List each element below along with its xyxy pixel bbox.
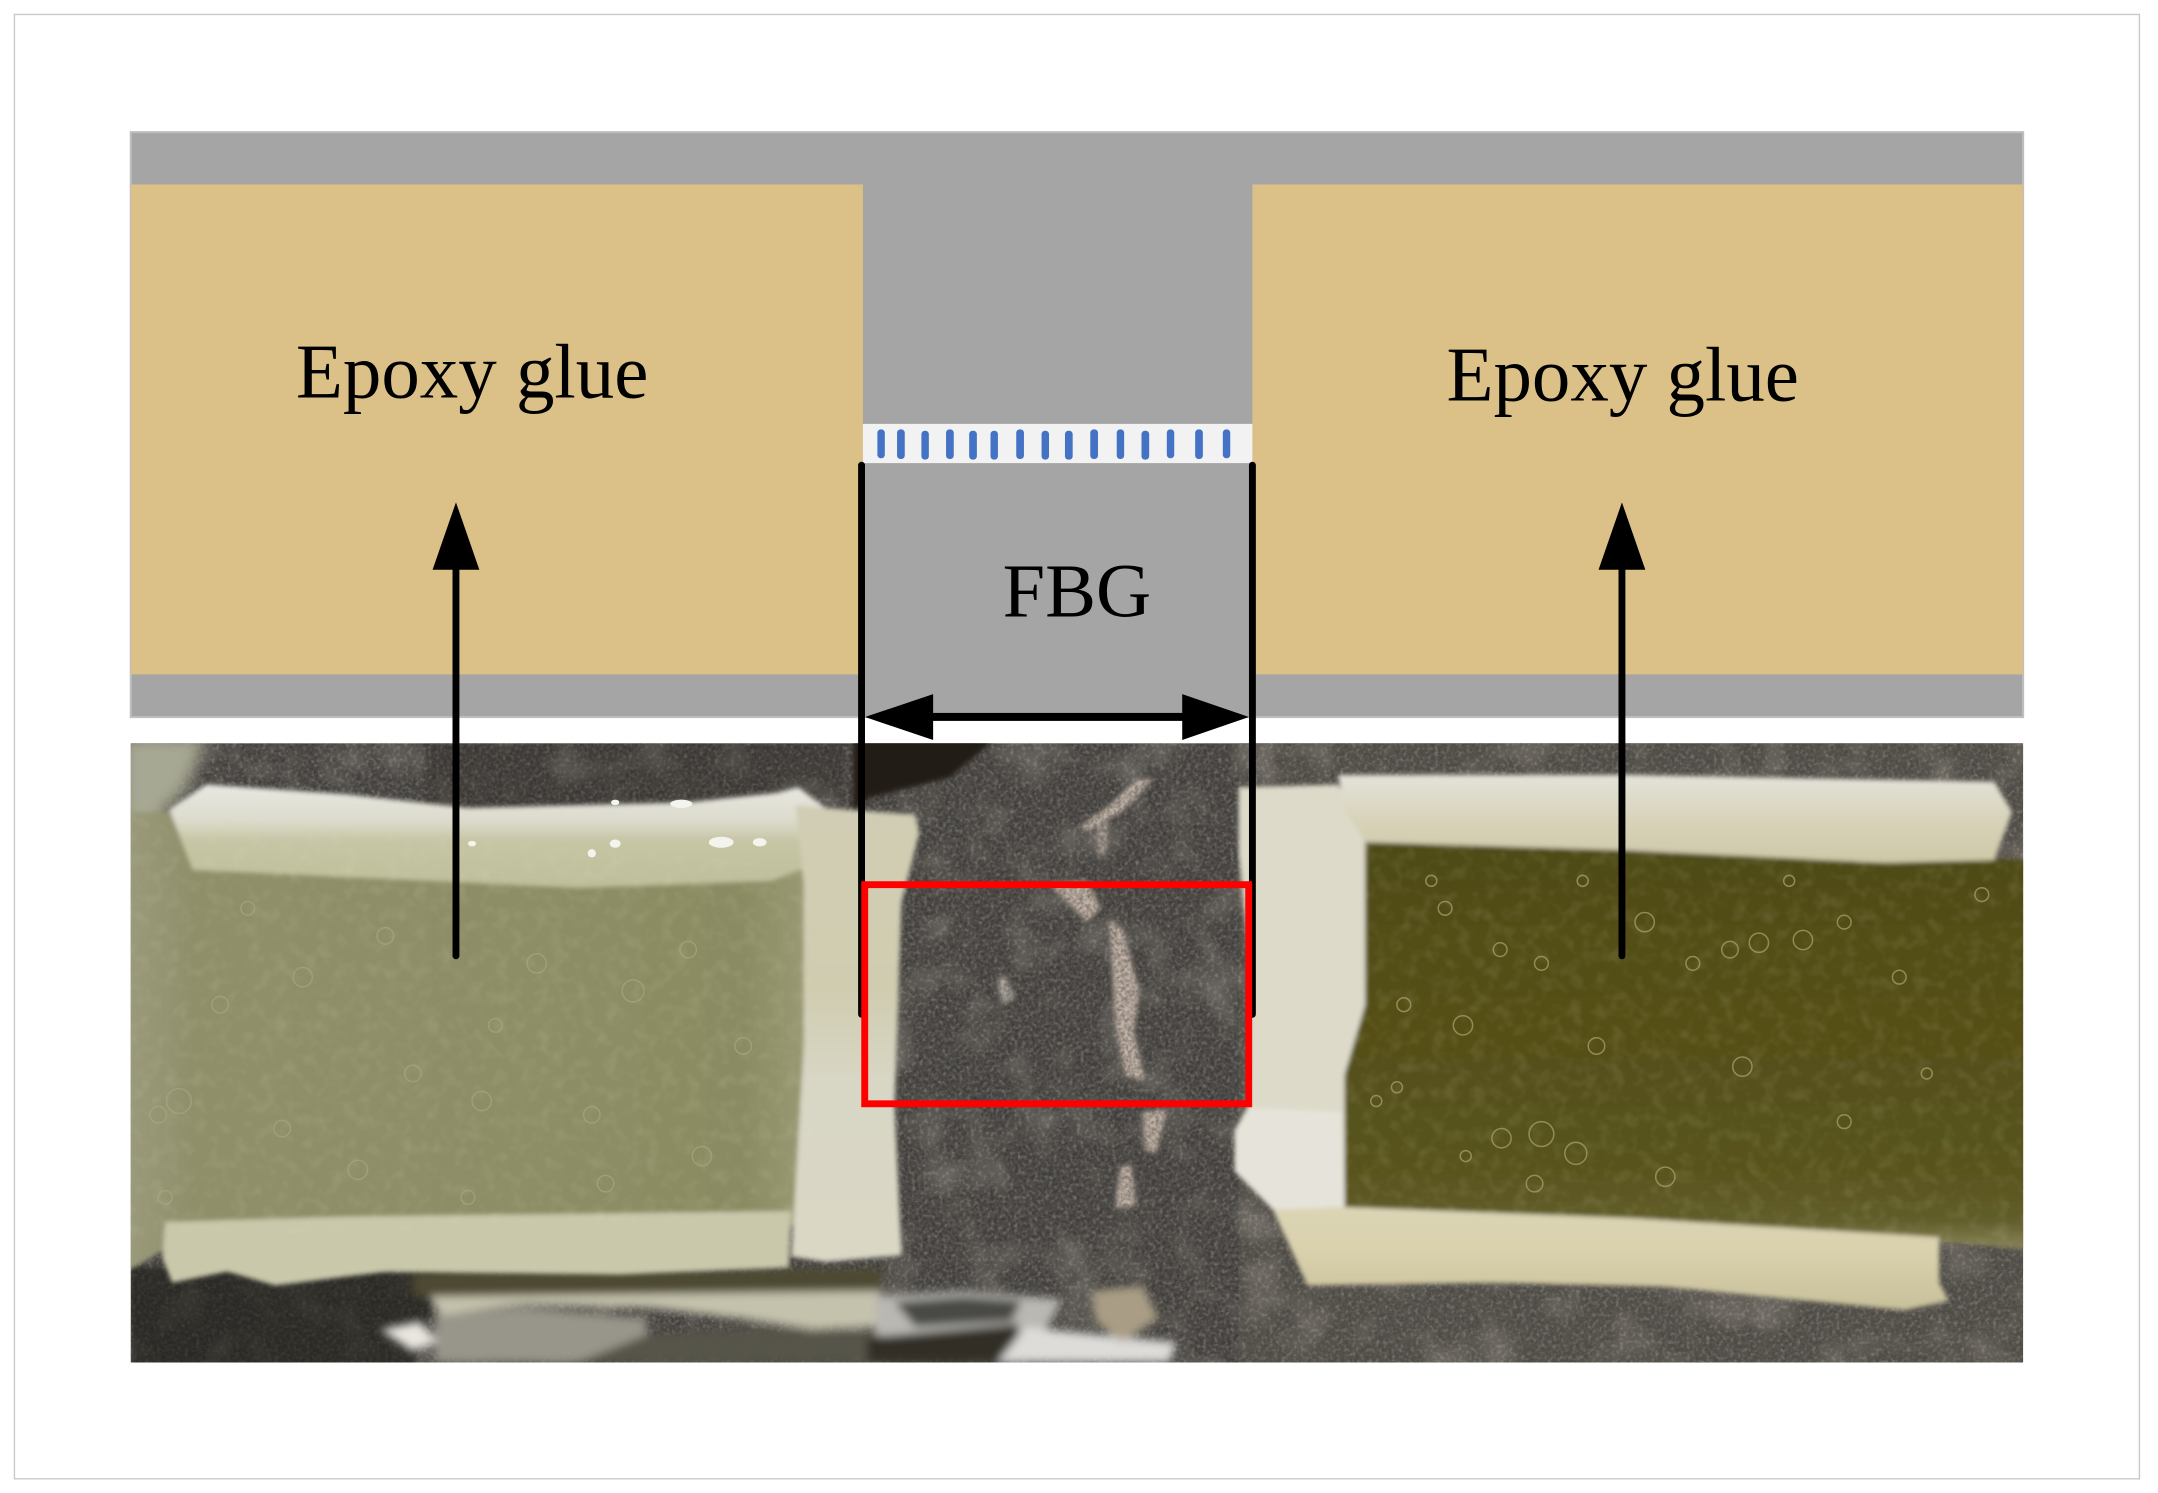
FBG grating ticks [877,429,1230,460]
right resin block [1235,775,2030,1310]
right dimension line [1250,465,1255,1014]
right bubbles [1371,875,1989,1192]
rock background [131,736,2023,1369]
bottom glue residue [380,1269,1177,1363]
right epoxy glue block [1252,184,2023,674]
arrow: right upward [1599,502,1645,959]
left bottom strip [162,1211,791,1285]
left olive resin [124,812,812,1273]
right top strip [1338,775,2012,863]
panel: schematic cross-section [131,132,2023,717]
arrow: left upward [433,502,479,959]
left specular glints [468,800,767,857]
left epoxy glue block [131,184,863,674]
right side strip [1235,784,1365,1210]
dark lower left ground [131,1266,440,1369]
panel: photograph of bonded specimen [121,736,2030,1369]
right bottom strip [1273,1207,1949,1310]
red highlight box [865,885,1249,1104]
right resin texture [1345,842,2023,1250]
label: left Epoxy glue: Epoxy glue [296,329,648,415]
left resin block [124,784,919,1285]
left bubbles [150,901,751,1204]
arrow: FBG length double-headed [865,694,1249,740]
left top strip [169,784,826,888]
right olive resin [1345,840,2030,1250]
fibre band [863,424,1252,463]
rock vein [996,779,1167,1208]
label: FBG: FBG [1003,549,1151,634]
left resin texture [168,858,789,1216]
upper-left haze [130,743,212,886]
grey substrate [131,132,2023,717]
label: right Epoxy glue: Epoxy glue [1446,332,1799,418]
left side strip [791,805,919,1262]
left dimension line [859,465,864,1014]
dark shadow corner [850,743,994,810]
